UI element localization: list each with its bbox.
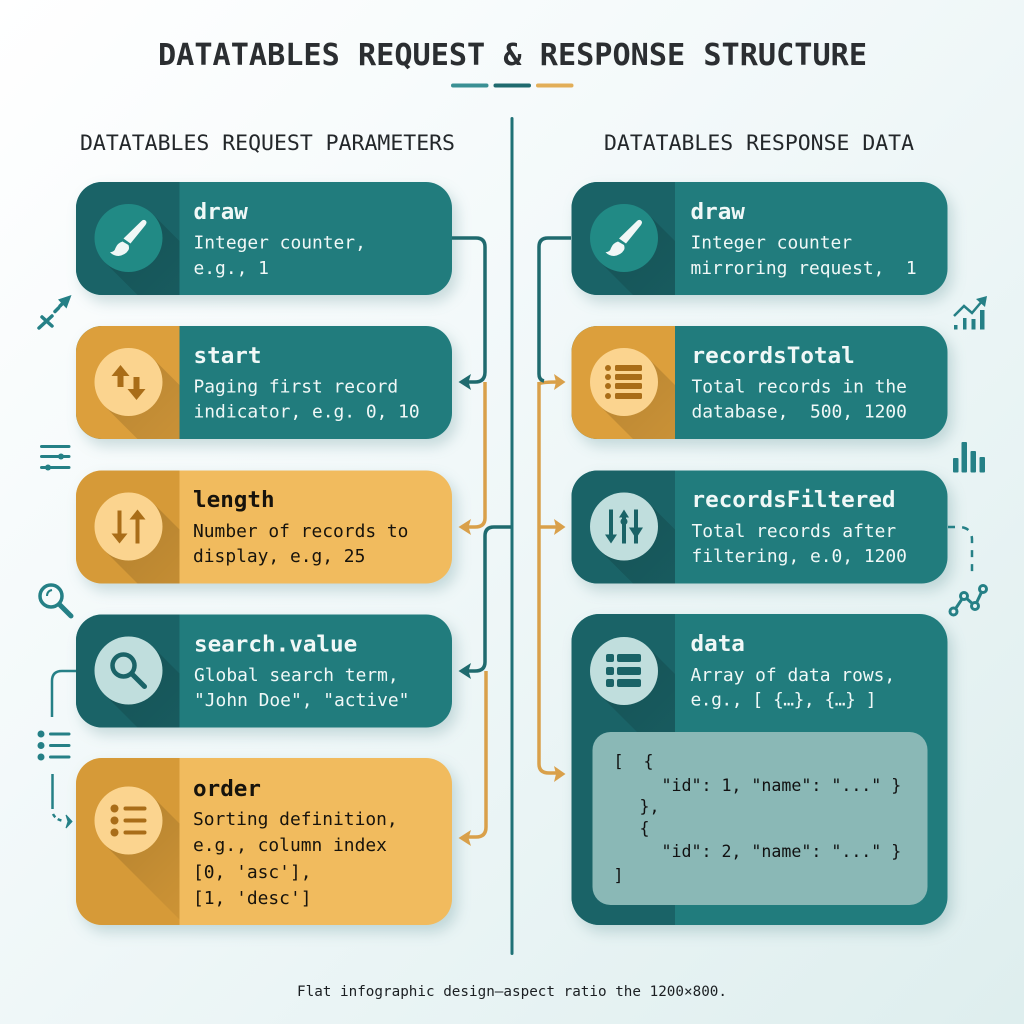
- heading: request parameters: DATATABLES REQUEST PARAMETERS: [80, 131, 455, 156]
- connector: response amber branch: [539, 374, 566, 782]
- card: response recordsTotal: [570, 326, 958, 452]
- card: request order: order: [193, 776, 261, 802]
- card: request search.value: Global search term,: [194, 665, 399, 686]
- card: request start: [75, 326, 463, 452]
- card: response draw: draw: [690, 199, 745, 225]
- connector: center to search.value: [458, 527, 511, 679]
- connector: side list to order: [52, 774, 72, 828]
- title: DATATABLES REQUEST & RESPONSE STRUCTURE: [158, 38, 867, 73]
- heading: response data: DATATABLES RESPONSE DATA: [604, 131, 914, 156]
- card: request draw: Integer counter,: [194, 232, 366, 254]
- card: request length: length: [193, 487, 275, 513]
- card: request draw: e.g., 1: [194, 258, 269, 279]
- card: request order: [76, 758, 452, 934]
- card: response recordsTotal: Total records in the: [692, 376, 907, 398]
- json code panel: },: [640, 797, 659, 816]
- card: request draw: [75, 182, 463, 308]
- icon: side list: [38, 730, 70, 760]
- icon: table rows: [606, 654, 641, 687]
- json code panel: "id": 1, "name": "..." }: [662, 776, 901, 795]
- card: request start: Paging first record: [194, 376, 398, 398]
- card: request length: display, e.g, 25: [193, 546, 365, 567]
- card: request length: [75, 470, 463, 596]
- card: response draw: mirroring request, 1: [690, 258, 917, 279]
- icon: filter sliders: [605, 510, 643, 544]
- connector: search.value to order: [458, 671, 486, 846]
- icon: brush: [110, 220, 146, 256]
- card: response recordsTotal: database, 500, 1200: [692, 402, 907, 422]
- footer caption: Flat infographic design—aspect ratio the 1200×800.: [297, 984, 727, 1000]
- card: request order: [0, 'asc'],: [193, 862, 311, 883]
- card: response recordsFiltered: [570, 470, 958, 596]
- card: request start: indicator, e.g. 0, 10: [194, 402, 420, 422]
- card: request start: start: [194, 343, 262, 369]
- card: request length: Number of records to: [193, 521, 408, 542]
- center divider: [510, 117, 514, 955]
- card: response recordsFiltered: Total records after: [692, 521, 896, 542]
- icon: swap arrows: [112, 365, 146, 400]
- icon: side diagonal arrows: [39, 295, 72, 328]
- icon: side network: [950, 586, 986, 615]
- card: request order: Sorting definition,: [193, 809, 398, 830]
- card: response recordsFiltered: filtering, e.0, 1200: [692, 546, 907, 567]
- icon: side bar chart: [953, 442, 985, 472]
- card: request search.value: "John Doe", "active": [194, 690, 409, 711]
- icon: sort arrows: [112, 510, 146, 544]
- card: response draw: Integer counter: [690, 232, 852, 254]
- icon: list: [110, 804, 146, 836]
- connector: dashed recordsFiltered to network: [948, 527, 972, 578]
- icon: side sliders: [40, 445, 70, 470]
- json code panel: [ {: [614, 752, 653, 771]
- card: request order: e.g., column index: [193, 835, 387, 856]
- icon: brush: [606, 220, 642, 256]
- card: response data: Array of data rows,: [690, 665, 895, 686]
- json code panel: "id": 2, "name": "..." }: [662, 842, 901, 861]
- json code panel: [592, 732, 928, 905]
- connector: search.value to side list: [52, 671, 76, 717]
- card: request order: [1, 'desc']: [193, 888, 311, 909]
- icon: magnifier: [112, 654, 144, 686]
- icon: side growth chart: [954, 296, 987, 330]
- icon: dense list: [605, 365, 642, 399]
- connector: response draw to total: [539, 238, 571, 381]
- card: request search.value: search.value: [194, 632, 357, 658]
- json code panel: ]: [614, 866, 624, 885]
- title accent bars: [451, 84, 574, 88]
- connector: draw to start: [452, 238, 485, 390]
- icon: side magnifier: [40, 585, 71, 616]
- card: response data: e.g., [ {…}, {…} ]: [690, 690, 876, 710]
- card: response recordsTotal: recordsTotal: [692, 343, 855, 369]
- card: response recordsFiltered: recordsFiltered: [692, 487, 896, 513]
- card: response data: [572, 614, 948, 925]
- card: request draw: draw: [194, 199, 248, 225]
- connector: start to length: [458, 382, 485, 535]
- json code panel: {: [640, 819, 650, 838]
- card: response data: data: [690, 631, 745, 657]
- card: response draw: [570, 182, 958, 308]
- card: request search.value: [75, 614, 463, 740]
